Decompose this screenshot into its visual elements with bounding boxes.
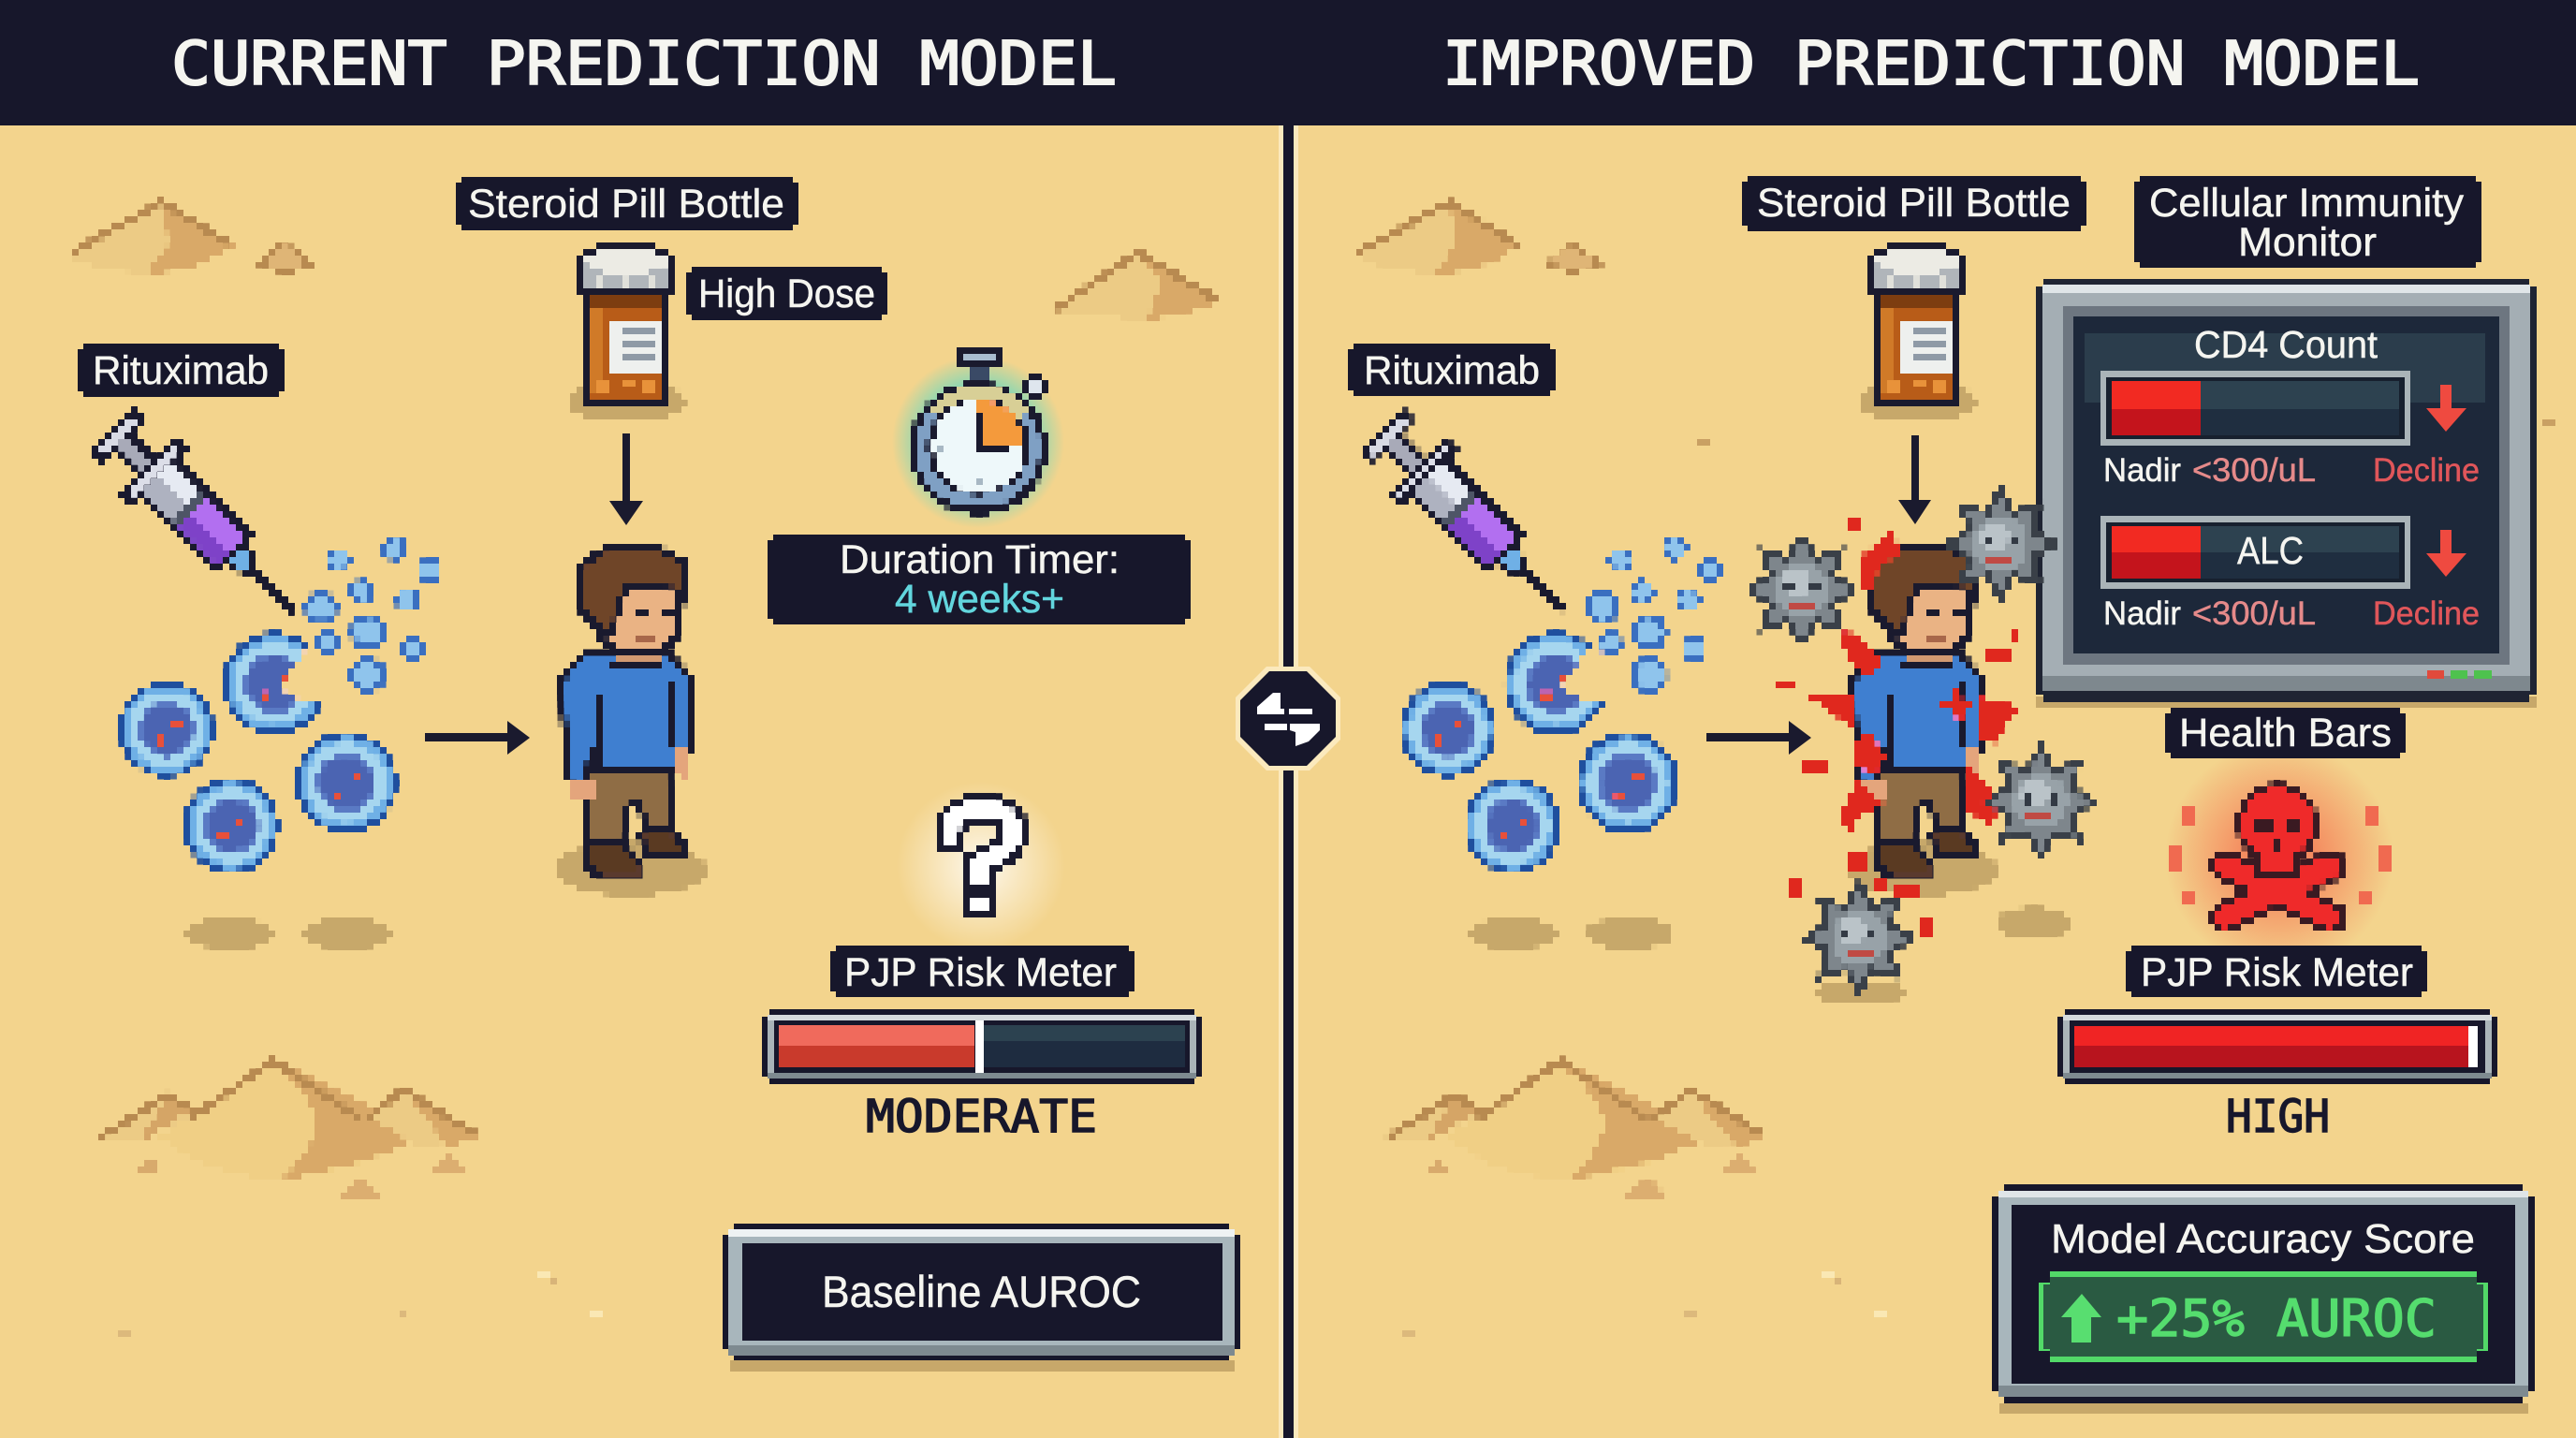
text: ALC: ALC <box>2237 529 2304 572</box>
text: ALC nadir row: <300/uL <box>2192 595 2316 632</box>
status lights <box>2427 670 2492 679</box>
text: CD4 count: CD4 Count <box>2194 323 2378 366</box>
character: patient right <box>1846 549 1998 896</box>
group: immune cells left <box>119 625 397 873</box>
arrow: steroid to patient left <box>609 433 643 525</box>
background dunes: right panel <box>1354 199 1890 1336</box>
arrow: cells to patient left <box>425 721 530 755</box>
label: rituximab left: Rituximab <box>93 348 269 393</box>
shadows under cells <box>186 917 1674 949</box>
divider line <box>1279 125 1298 1438</box>
title: improved prediction model: IMPROVED PREDICTION MODEL <box>1442 30 2420 99</box>
label: steroid pill bottle left: Steroid Pill Bottle <box>468 182 784 227</box>
text: CD4 nadir row <box>2103 452 2480 489</box>
icon: skull and crossbones <box>2168 783 2389 917</box>
blood splatter <box>1775 521 2019 936</box>
shadows under viruses <box>1814 907 2071 1005</box>
fragments: depleted cell pieces right <box>1586 536 1723 693</box>
text: CD4 nadir row: Decline <box>2373 452 2480 489</box>
icon: rituximab syringe right <box>1353 401 1591 639</box>
icon: virus bottom <box>1805 884 1913 992</box>
icon: steroid pill bottle right <box>1858 242 1976 422</box>
label: PJP risk meter left: PJP Risk Meter <box>844 950 1117 995</box>
label: cellular immunity monitor: Monitor <box>2238 220 2377 265</box>
icon: ALC down arrow <box>2426 530 2466 577</box>
panel: baseline AUROC: Baseline AUROC <box>822 1267 1141 1316</box>
label: cellular immunity monitor: Cellular Immunity <box>2149 181 2465 226</box>
panel: model accuracy score <box>1992 1184 2535 1414</box>
character: patient left <box>555 549 707 896</box>
fragments: depleted cell pieces left <box>304 536 442 693</box>
background dune: left panel upper right <box>1053 251 1222 320</box>
icon: up arrow <box>2061 1294 2101 1343</box>
text: ALC nadir row: Decline <box>2373 595 2480 632</box>
bar: ALC <box>2100 516 2410 589</box>
header bar <box>0 0 2576 125</box>
label: steroid pill bottle right: Steroid Pill Bottle <box>1757 181 2071 226</box>
icon: left arrow <box>1257 693 1312 714</box>
label: PJP risk meter right: PJP Risk Meter <box>2141 950 2413 995</box>
panel: model accuracy score: Model Accuracy Score <box>2051 1216 2475 1262</box>
text: high: HIGH <box>2226 1091 2330 1143</box>
text: CD4 nadir row: Nadir <box>2103 452 2181 489</box>
green score box: +25% AUROC <box>2116 1289 2437 1348</box>
label: duration timer: 4 weeks+ <box>895 577 1064 622</box>
bar: CD4 count <box>2100 371 2410 446</box>
label: duration timer <box>768 535 1191 624</box>
meter: PJP risk moderate <box>762 1009 1202 1084</box>
glow: question mark <box>897 782 1065 950</box>
label: health bars: Health Bars <box>2179 711 2392 756</box>
label: cellular immunity monitor <box>2134 176 2481 268</box>
arrow: steroid to patient right <box>1898 435 1931 524</box>
specks <box>1696 421 2554 446</box>
layer: pixel art sprites <box>66 199 2554 1336</box>
title: current prediction model: CURRENT PREDICTION MODEL <box>171 30 1117 99</box>
badge: compare arrows <box>1236 667 1340 770</box>
icon: question mark <box>950 809 1014 918</box>
icon: CD4 down arrow <box>2426 385 2466 432</box>
text: ALC nadir row <box>2103 595 2480 632</box>
panel: baseline AUROC <box>723 1224 1240 1372</box>
label: duration timer: Duration Timer: <box>840 537 1120 582</box>
group: immune cells right <box>1400 625 1678 873</box>
icon: virus upper right <box>1946 490 2055 598</box>
icon: virus upper left <box>1748 536 1856 644</box>
arrow: cells to patient right <box>1706 721 1811 755</box>
text: CD4 nadir row: <300/uL <box>2192 452 2316 489</box>
meter: PJP risk high <box>2057 1009 2497 1084</box>
green score box <box>2039 1271 2488 1362</box>
icon: right arrow <box>1265 724 1320 746</box>
icon: stopwatch <box>909 349 1047 515</box>
text: ALC nadir row: Nadir <box>2103 595 2181 632</box>
text: moderate: MODERATE <box>866 1091 1097 1143</box>
glow: stopwatch <box>892 356 1064 528</box>
label: rituximab right: Rituximab <box>1364 348 1540 393</box>
glow: skull <box>2165 742 2393 971</box>
icon: virus lower right <box>1986 747 2095 856</box>
label: high dose: High Dose <box>698 271 875 316</box>
background dunes: left panel <box>66 199 603 1336</box>
panel: cellular immunity monitor <box>2036 279 2537 708</box>
icon: rituximab syringe left <box>82 401 321 639</box>
icon: steroid pill bottle left <box>567 242 685 422</box>
